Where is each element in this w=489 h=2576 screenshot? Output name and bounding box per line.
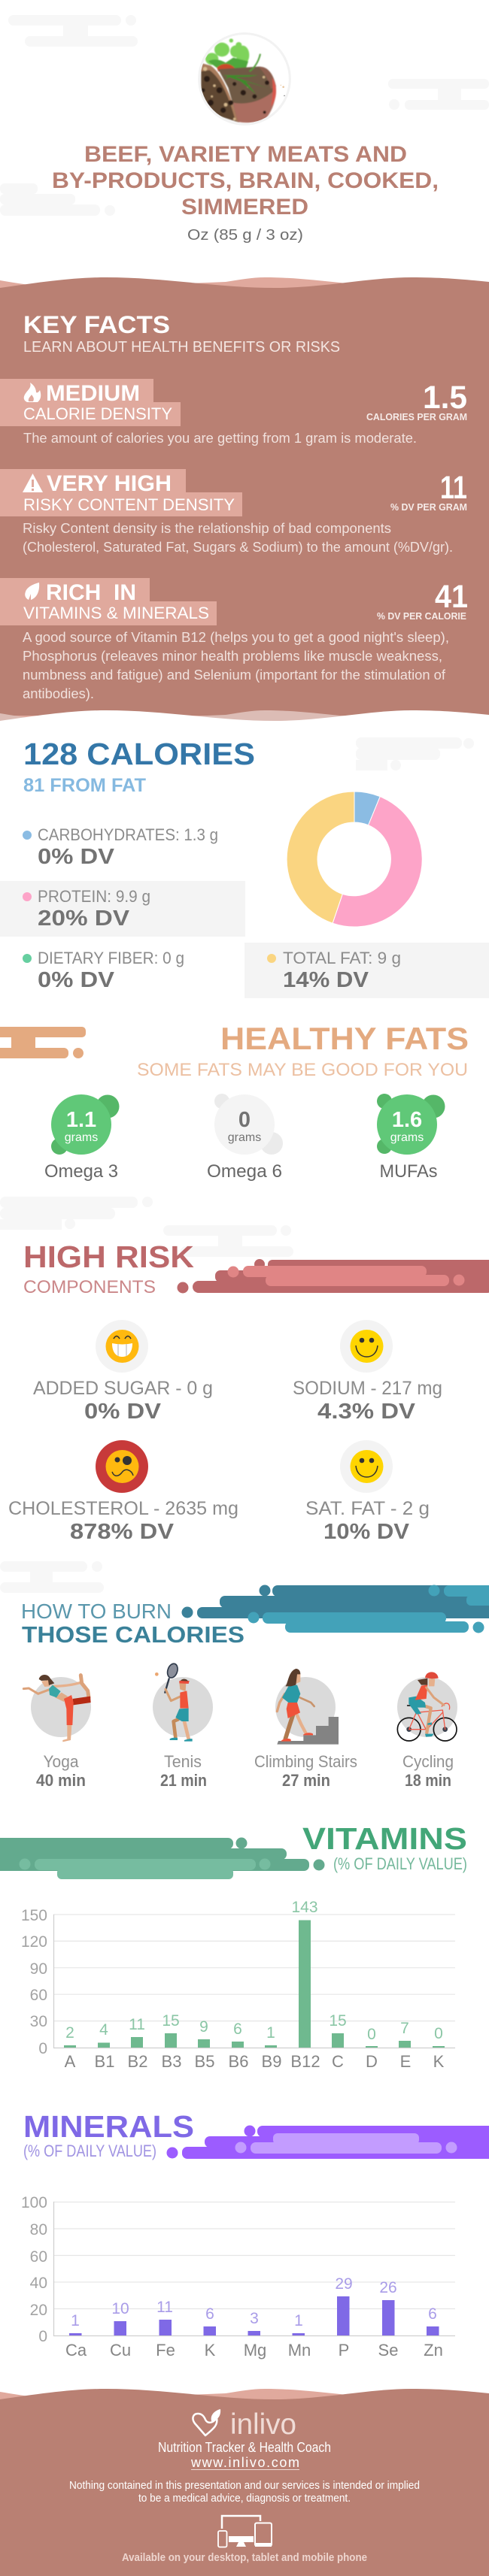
unit: % DV PER GRAM: [390, 501, 467, 513]
minerals bar chart: 0: [38, 2328, 47, 2345]
disclaimer: Nothing contained in this presentation and our services is intended or implied: [69, 2480, 420, 2492]
value: 11: [440, 470, 467, 506]
vitamins header graphic: [0, 1837, 325, 1879]
unit: CALORIES PER GRAM: [366, 411, 467, 422]
minerals bar chart: Mn: [288, 2341, 311, 2360]
description: Risky Content density is the relationship of bad components: [23, 521, 391, 536]
description: (Cholesterol, Saturated Fat, Sugars & Sodium) to the amount (%DV/gr).: [23, 540, 453, 555]
description: A good source of Vitamin B12 (helps you to get a good night's sleep),: [23, 630, 449, 645]
risk: cholesterol: 878% DV: [70, 1520, 175, 1544]
minerals bar chart: 29: [335, 2275, 353, 2293]
vitamins bar chart: B12: [290, 2052, 320, 2071]
fat: MUFAs: 1.6: [392, 1108, 422, 1132]
fat: omega 3: grams: [65, 1131, 98, 1144]
label: CALORIE DENSITY: [23, 404, 172, 423]
minerals bar chart: 1: [71, 2312, 80, 2329]
vitamins bar chart: 30: [30, 2013, 47, 2030]
fat: omega 6: Omega 6: [207, 1161, 282, 1182]
minerals heading: MINERALS: [23, 2109, 194, 2144]
vitamins bar chart: B6: [229, 2052, 248, 2071]
risk: saturated fat: 10% DV: [323, 1520, 410, 1544]
vitamins bar chart: 6: [233, 2021, 242, 2038]
risk: sodium: [293, 1320, 442, 1424]
icon: worried face: [105, 1450, 138, 1483]
vitamins bar chart: B2: [128, 2052, 147, 2071]
icon: stair climber: [277, 1669, 339, 1745]
icon: devices: [218, 2516, 272, 2547]
macro legend: protein: 20% DV: [38, 907, 130, 931]
vitamins bar chart: 4: [99, 2021, 108, 2039]
logo: inlivo: [230, 2408, 296, 2441]
background decoration shapes: [0, 15, 489, 1593]
label: RISKY CONTENT DENSITY: [23, 495, 235, 514]
exercise: climbing stairs: [254, 1669, 357, 1790]
macro legend: total fat: TOTAL FAT: 9 g: [283, 949, 401, 967]
vitamins bar chart: 0: [367, 2026, 376, 2043]
minerals bar chart: 1: [294, 2312, 303, 2329]
exercise: climbing stairs: Climbing Stairs: [254, 1752, 357, 1771]
icon: smiling face: [351, 1330, 384, 1363]
value: 1.5: [423, 380, 467, 416]
vitamins bar chart: 150: [21, 1907, 47, 1924]
minerals bar chart: 6: [205, 2305, 214, 2323]
exercise: tennis: Tenis: [164, 1752, 202, 1771]
disclaimer: [69, 2480, 420, 2505]
vitamins bar chart: K: [433, 2052, 445, 2071]
minerals bar chart: 20: [30, 2302, 47, 2319]
tagline: Nutrition Tracker & Health Coach: [158, 2440, 331, 2455]
minerals bar chart: 3: [250, 2310, 259, 2327]
description: [23, 630, 449, 701]
key facts subheading: LEARN ABOUT HEALTH BENEFITS OR RISKS: [23, 339, 340, 356]
calorie burn heading: [21, 1600, 244, 1648]
fat: MUFAs: [377, 1094, 445, 1182]
unit: % DV PER CALORIE: [377, 610, 466, 622]
macro legend: carbohydrates: 0% DV: [38, 845, 115, 869]
description: The amount of calories you are getting from 1 gram is moderate.: [23, 431, 417, 446]
minerals bar chart: 100: [21, 2194, 47, 2211]
serving size: Oz (85 g / 3 oz): [187, 227, 303, 244]
risk: added sugar: ADDED SUGAR - 0 g: [33, 1378, 213, 1399]
minerals bar chart: 40: [30, 2275, 47, 2292]
minerals bar chart: 60: [30, 2248, 47, 2266]
vitamins heading: VITAMINS: [302, 1821, 467, 1856]
calorie burn heading: HOW TO BURN: [21, 1600, 172, 1623]
minerals bar chart: 6: [428, 2305, 437, 2323]
logo: [193, 2408, 296, 2441]
vitamins bar chart: 0: [38, 2040, 47, 2057]
fat: omega 3: [44, 1094, 119, 1182]
icon: cyclist: [397, 1672, 457, 1741]
key facts heading: KEY FACTS: [23, 311, 170, 338]
vitamins bar chart: E: [400, 2052, 411, 2071]
icon: flame: [24, 383, 41, 402]
icon: smiling face: [351, 1450, 384, 1483]
vitamins bar chart: 90: [30, 1960, 47, 1978]
risk: saturated fat: SAT. FAT - 2 g: [305, 1498, 430, 1519]
exercise: yoga: Yoga: [44, 1752, 79, 1771]
high risk subheading: COMPONENTS: [23, 1277, 156, 1297]
panel: key facts: [0, 277, 489, 733]
description: numbness and fatigue) and Selenium (important for the stimulation of: [23, 667, 446, 683]
risk: added sugar: 0% DV: [84, 1400, 162, 1424]
vitamins bar chart: 9: [199, 2018, 208, 2036]
minerals bar chart: Zn: [424, 2341, 443, 2360]
risk: cholesterol: [8, 1440, 238, 1544]
fat: omega 6: 0: [238, 1108, 251, 1132]
exercise: tennis: [153, 1663, 213, 1790]
minerals bar chart: Ca: [65, 2341, 87, 2360]
macro legend: total fat: 14% DV: [283, 968, 369, 992]
vitamins bar chart: 11: [129, 2016, 145, 2033]
calorie burn header graphic: [182, 1585, 489, 1633]
fat: omega 3: 1.1: [66, 1108, 96, 1132]
risk: sodium: SODIUM - 217 mg: [293, 1378, 442, 1399]
healthy fats header graphic: [0, 1027, 86, 1058]
minerals bar chart: Cu: [110, 2341, 131, 2360]
icon: warning triangle: [23, 474, 43, 492]
risk: saturated fat: [305, 1440, 430, 1544]
rating: RICH IN: [46, 580, 136, 605]
vitamins bar chart: 60: [30, 1987, 47, 2004]
vitamins bar chart: A: [65, 2052, 76, 2071]
calories from fat: 81 FROM FAT: [23, 775, 146, 796]
fat: omega 3: Omega 3: [44, 1161, 118, 1182]
availability note: Available on your desktop, tablet and mobile phone: [122, 2551, 367, 2564]
fat: omega 6: [207, 1094, 283, 1182]
minerals bar chart: Fe: [156, 2341, 175, 2360]
fact: risky content density: [0, 469, 467, 555]
minerals subheading: (% OF DAILY VALUE): [23, 2142, 156, 2160]
minerals bar chart: 11: [156, 2299, 173, 2316]
macronutrient donut chart: [287, 792, 422, 927]
website: www.inlivo.com: [190, 2455, 299, 2470]
exercise: yoga: 40 min: [36, 1771, 86, 1790]
fact: vitamins and minerals: [0, 578, 468, 701]
title: BEEF, VARIETY MEATS AND: [84, 142, 407, 167]
exercise: cycling: 18 min: [405, 1771, 451, 1790]
label: VITAMINS & MINERALS: [23, 604, 209, 622]
macro legend: carbohydrates: CARBOHYDRATES: 1.3 g: [38, 825, 218, 844]
vitamins bar chart: [21, 1899, 455, 2071]
description: antibodies).: [23, 686, 94, 701]
vitamins bar chart: 2: [65, 2024, 74, 2042]
title: [52, 142, 439, 219]
value: 41: [435, 579, 468, 615]
calorie burn heading: THOSE CALORIES: [22, 1621, 244, 1648]
macro legend: protein: [0, 881, 245, 937]
vitamins bar chart: 15: [329, 2012, 347, 2030]
minerals header graphic: [167, 2126, 489, 2159]
icon: grinning face: [105, 1330, 138, 1363]
exercise: yoga: [23, 1675, 91, 1790]
exercise: cycling: [397, 1672, 457, 1790]
macro legend: total fat: [244, 943, 489, 998]
description: Phosphorus (releaves minor health problems like muscle weakness,: [23, 649, 442, 664]
vitamins bar chart: D: [366, 2052, 378, 2071]
exercise: climbing stairs: 27 min: [282, 1771, 330, 1790]
vitamins bar chart: C: [332, 2052, 344, 2071]
risk: added sugar: [33, 1320, 213, 1424]
icon: yoga figure: [23, 1675, 91, 1742]
hero food photo: [199, 34, 290, 124]
fat: MUFAs: MUFAs: [379, 1161, 438, 1182]
vitamins bar chart: 0: [434, 2025, 443, 2042]
vitamins bar chart: 1: [266, 2024, 275, 2042]
rating: VERY HIGH: [47, 471, 172, 496]
fact: calorie density: [0, 379, 467, 446]
title: SIMMERED: [181, 195, 308, 219]
minerals bar chart: K: [205, 2341, 216, 2360]
macro legend: dietary fiber: DIETARY FIBER: 0 g: [38, 949, 184, 967]
healthy fats subheading: SOME FATS MAY BE GOOD FOR YOU: [137, 1060, 468, 1080]
vitamins bar chart: B3: [162, 2052, 181, 2071]
fat: omega 6: grams: [228, 1131, 261, 1144]
minerals bar chart: 26: [379, 2279, 397, 2296]
risk: cholesterol: CHOLESTEROL - 2635 mg: [8, 1498, 238, 1519]
macro legend: carbohydrates: [23, 825, 218, 869]
macro legend: protein: PROTEIN: 9.9 g: [38, 887, 150, 906]
vitamins bar chart: 120: [21, 1933, 47, 1951]
title: BY-PRODUCTS, BRAIN, COOKED,: [52, 168, 439, 193]
description: [23, 521, 453, 555]
icon: tennis player: [155, 1663, 193, 1742]
vitamins bar chart: 143: [291, 1899, 318, 1916]
macro legend: dietary fiber: [23, 949, 184, 992]
vitamins bar chart: 15: [162, 2012, 180, 2030]
vitamins bar chart: B1: [95, 2052, 114, 2071]
icon: leaf: [25, 583, 39, 600]
vitamins bar chart: B9: [262, 2052, 281, 2071]
exercise: tennis: 21 min: [160, 1771, 207, 1790]
calories heading: 128 CALORIES: [23, 737, 255, 771]
vitamins bar chart: B5: [195, 2052, 214, 2071]
healthy fats heading: HEALTHY FATS: [220, 1021, 469, 1056]
disclaimer: to be a medical advice, diagnosis or treatment.: [138, 2493, 351, 2505]
footer panel: [0, 2389, 489, 2576]
minerals bar chart: Se: [378, 2341, 398, 2360]
minerals bar chart: 80: [30, 2221, 47, 2238]
minerals bar chart: 10: [111, 2300, 129, 2317]
minerals bar chart: [21, 2194, 455, 2360]
high risk header graphic: [178, 1259, 489, 1293]
risk: sodium: 4.3% DV: [317, 1400, 416, 1424]
exercise: cycling: Cycling: [402, 1752, 454, 1771]
rating: MEDIUM: [46, 381, 140, 406]
minerals bar chart: Mg: [244, 2341, 266, 2360]
fat: MUFAs: grams: [390, 1131, 424, 1144]
vitamins bar chart: 7: [400, 2020, 409, 2037]
macro legend: dietary fiber: 0% DV: [38, 968, 115, 992]
minerals bar chart: P: [339, 2341, 349, 2360]
high risk heading: HIGH RISK: [23, 1240, 194, 1274]
